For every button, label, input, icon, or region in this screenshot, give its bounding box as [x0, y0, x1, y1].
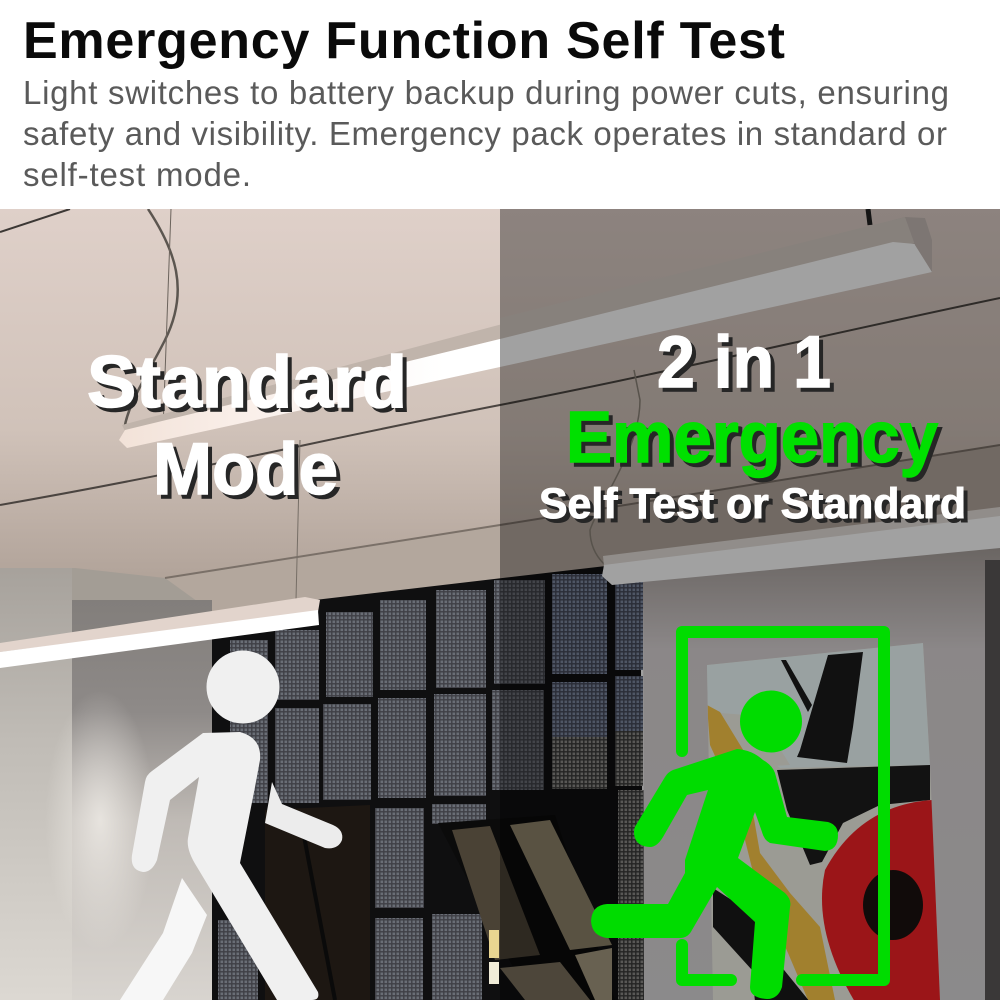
- power-cut darkening overlay on right half: [500, 209, 1000, 1000]
- right wall: [643, 570, 985, 1000]
- icon: green emergency exit door: [682, 632, 884, 980]
- label: 2 in 1 Emergency Self Test or Standard: 2 in 1: [657, 322, 831, 403]
- label: 2 in 1 Emergency Self Test or Standard: Self Test or Standard: [539, 480, 966, 528]
- label: 2 in 1 Emergency Self Test or Standard: Emergency: [566, 398, 938, 478]
- window grid: [212, 562, 644, 1000]
- label: 2 in 1 Emergency Self Test or Standard: [539, 322, 966, 528]
- intro paragraph: safety and visibility. Emergency pack operates in standard or: [23, 115, 947, 152]
- dark glazing panes: [265, 805, 370, 1000]
- photo: office interior with suspended lights: [0, 209, 1000, 1000]
- textured angled glass: [438, 820, 486, 824]
- intro paragraph: Light switches to battery backup during power cuts, ensuring: [23, 74, 949, 111]
- ceiling beam: [165, 445, 1000, 612]
- ceiling: [0, 209, 1000, 609]
- intro paragraph: [23, 74, 949, 193]
- icon: green running person: [591, 690, 838, 999]
- long pendant light fixture: [119, 217, 932, 448]
- title: Emergency Function Self Test: [23, 12, 785, 70]
- label: Standard Mode: Mode: [153, 429, 338, 510]
- right pendant light fixture: [602, 507, 1000, 585]
- left pendant light fixture: [0, 597, 320, 668]
- label: Standard Mode: Standard: [87, 342, 407, 423]
- intro paragraph: self-test mode.: [23, 156, 251, 193]
- left wall: [72, 600, 212, 1000]
- artwork on wall: [707, 643, 945, 1000]
- ceiling cables: [0, 209, 1000, 600]
- label: Standard Mode: [87, 342, 407, 510]
- icon: white walking person: [120, 650, 342, 1000]
